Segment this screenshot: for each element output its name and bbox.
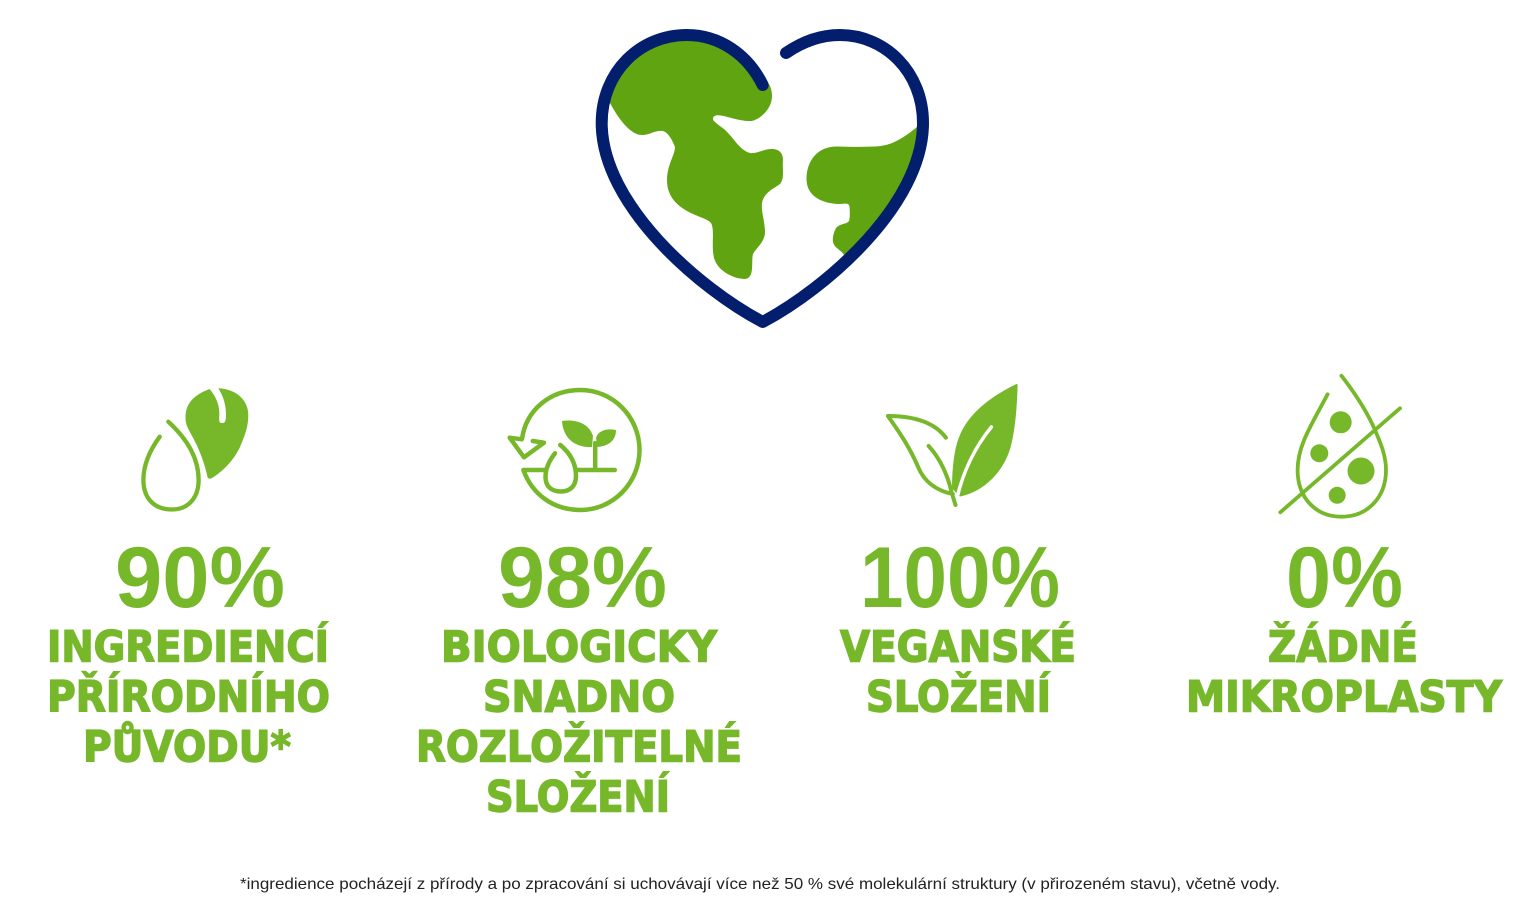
heart outline: [602, 35, 923, 322]
label: ingrediencí přírodního původu: PŘÍRODNÍHO: [47, 672, 330, 722]
panel: 90% natural origin: [47, 388, 330, 772]
figure: 90%: 90%: [115, 530, 285, 626]
label: veganské složení: [840, 622, 1076, 722]
icon: drop and leaf: [143, 388, 248, 510]
label: biologicky snadno rozložitelné složení: ROZLOŽITELNÉ: [416, 722, 742, 772]
label: ingrediencí přírodního původu: [47, 622, 330, 772]
icon: recycling ring with drop and sprout: [510, 390, 640, 510]
label: biologicky snadno rozložitelné složení: SLOŽENÍ: [486, 772, 670, 822]
icon: crossed drop with particles: [1280, 376, 1400, 517]
label: biologicky snadno rozložitelné složení: SNADNO: [483, 672, 675, 722]
panel: 98% biodegradable: [416, 390, 742, 822]
label: ingrediencí přírodního původu: INGREDIENCÍ: [47, 622, 329, 672]
panel: 0% microplastics: [1186, 376, 1503, 722]
figure: 98%: 98%: [498, 530, 667, 626]
panel: 100% vegan: [840, 385, 1076, 722]
label: biologicky snadno rozložitelné složení: [416, 622, 742, 822]
label: veganské složení: SLOŽENÍ: [866, 672, 1051, 722]
footnote: *ingredience pocházejí z přírody a po zpracování si uchovávají více než 50 % své molekulární struktury (v přirozeném stavu), včetně vody.: [240, 876, 1280, 893]
label: ingrediencí přírodního původu: PŮVODU*: [83, 722, 291, 772]
label: žádné mikroplasty: ŽÁDNÉ: [1268, 622, 1418, 672]
figure: 0%: 0%: [1286, 530, 1403, 626]
icon: heart with globe: [602, 35, 923, 322]
label: žádné mikroplasty: [1186, 622, 1503, 722]
label: biologicky snadno rozložitelné složení: BIOLOGICKY: [441, 622, 718, 672]
label: veganské složení: VEGANSKÉ: [840, 622, 1076, 672]
globe land: right continent: [806, 122, 923, 262]
figure: 100%: 100%: [860, 530, 1060, 626]
globe land: left continent: [606, 36, 783, 279]
icon: two leaves: [888, 385, 1017, 505]
